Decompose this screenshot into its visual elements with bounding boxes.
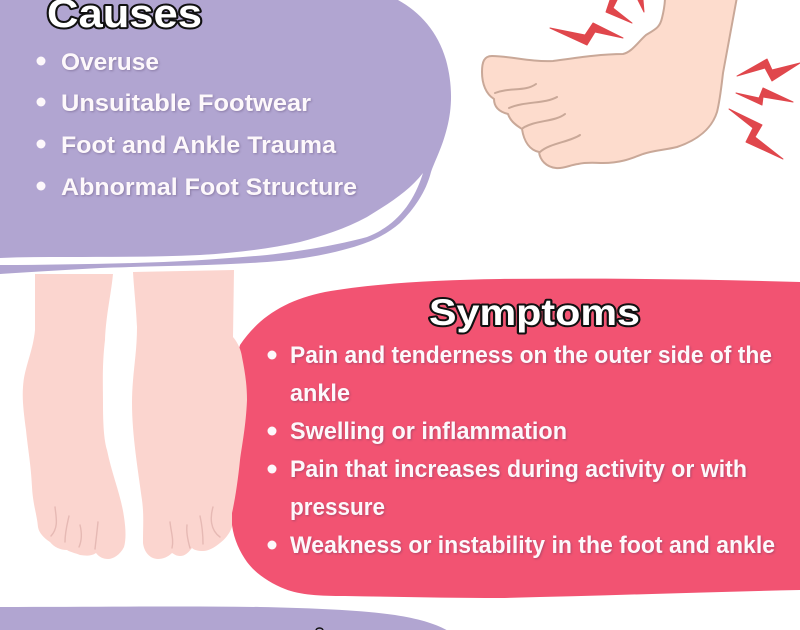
next section blob background	[0, 607, 450, 630]
causes blob background	[0, 0, 451, 274]
left foot	[23, 274, 125, 559]
cut-off heading fragment	[316, 628, 323, 630]
toe creases	[51, 507, 220, 549]
causes list: Foot and Ankle Trauma	[61, 132, 337, 159]
causes list	[36, 49, 357, 201]
causes list: Abnormal Foot Structure	[61, 174, 357, 201]
symptoms list: Swelling or inflammation	[290, 418, 567, 445]
foot outline	[482, 0, 737, 168]
causes list: Unsuitable Footwear	[61, 90, 311, 117]
symptoms list: Pain that increases during activity or with	[290, 456, 747, 483]
symptoms list: Pain and tenderness on the outer side of the	[290, 342, 772, 369]
symptoms list: pressure	[290, 494, 385, 521]
panel: causes	[0, 0, 451, 274]
panel: symptoms	[225, 279, 800, 598]
panel: next section	[0, 607, 450, 630]
illustration: pair of feet	[23, 270, 247, 559]
causes list: Overuse	[61, 49, 159, 76]
symptoms list: ankle	[290, 380, 350, 407]
symptoms list	[268, 342, 775, 559]
symptoms list: Weakness or instability in the foot and ankle	[290, 532, 775, 559]
illustration: painful foot	[482, 0, 800, 168]
symptoms blob background	[225, 279, 800, 598]
pain bolts	[550, 0, 800, 159]
right foot	[132, 270, 247, 559]
toe lines	[495, 84, 580, 152]
symptoms heading: Symptoms	[429, 292, 640, 333]
white swoosh	[0, 173, 423, 265]
